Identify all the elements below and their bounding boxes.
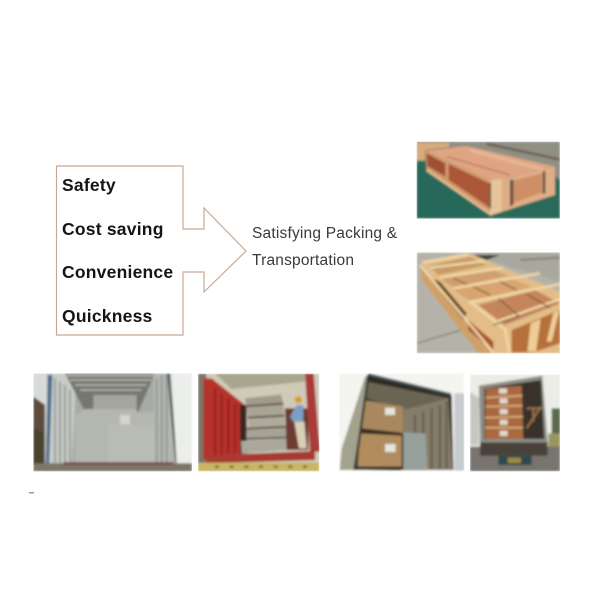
photo: red container with worker and crates [198,374,320,471]
benefit list [62,175,173,326]
small stray mark [29,492,34,494]
benefit list: Convenience [62,262,173,282]
result caption: Transportation [252,252,354,269]
photo: container loaded with metal sheets [33,373,192,471]
arrow-shaped outline [56,166,246,335]
result caption: Satisfying Packing & [252,225,398,242]
photo: closed wooden crate on green floor [417,142,560,219]
benefit list: Cost saving [62,219,164,239]
benefit list: Quickness [62,306,153,326]
benefit list: Safety [62,175,116,195]
photo: open container with cardboard pallets [339,373,464,471]
photo: wooden slatted crate on concrete [417,252,560,353]
result caption [252,225,398,269]
diagram: benefits box with arrow [56,166,246,335]
photo: truck loaded with crates [470,374,560,471]
